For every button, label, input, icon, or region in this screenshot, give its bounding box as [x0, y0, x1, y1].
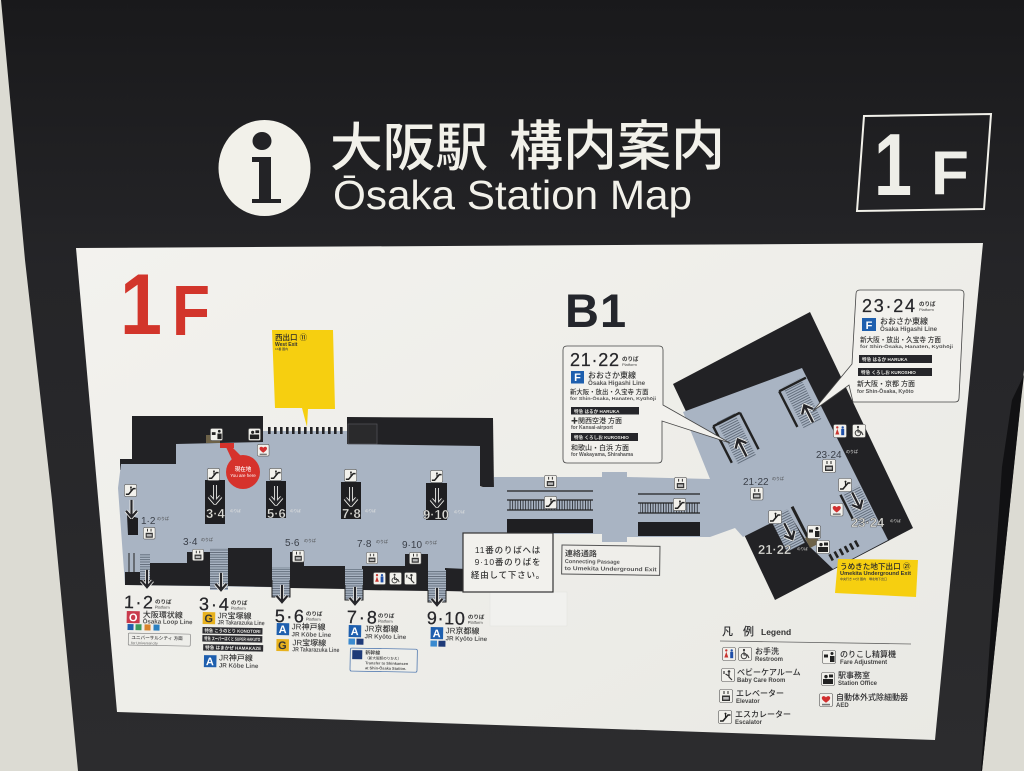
- callout: platforms 23-24: 新大阪・放出・久宝寺 方面: [860, 335, 941, 344]
- umekita exit doors: [830, 543, 858, 558]
- legend heading: 凡: [722, 625, 733, 638]
- platform info: 9-10: 9·10: [427, 608, 465, 629]
- platform info: 7-8: A: [351, 626, 359, 638]
- heading: 1F: F: [172, 272, 210, 351]
- callout: platforms 23-24: 新大阪・京都 方面: [857, 379, 915, 388]
- platform info: 9-10: A: [433, 628, 441, 640]
- callout: platforms 21-22: 和歌山・白浜 方面: [571, 443, 629, 452]
- floor platform labels: 1F: のりば: [201, 536, 213, 542]
- icons: 1F facilities: [124, 428, 443, 585]
- platform info: 5-6: [274, 606, 341, 654]
- callout: platforms 21-22: 21·22: [570, 350, 619, 370]
- platform info: 5-6: 5·6: [275, 606, 304, 626]
- legend: AED: AED: [836, 703, 849, 709]
- heading: B1: 1: [600, 284, 626, 337]
- callout: platforms 23-24: Ōsaka Higashi Line: [880, 326, 938, 333]
- platform info: 3-4: JR Kōbe Line: [219, 662, 259, 670]
- callout: platforms 21-22: F: [574, 372, 581, 384]
- callout: platforms 23-24: for Shin-Ōsaka, Kyōto: [857, 388, 914, 395]
- title: 構内案内: [509, 117, 725, 177]
- platform info: 1-2: [123, 592, 194, 646]
- platform info: 1-2: のりば: [155, 598, 172, 606]
- brown patch B1: [805, 533, 820, 548]
- callout: platforms 21-22: おおさか東線: [588, 370, 636, 380]
- floor plan: 1F south walls: [125, 548, 488, 592]
- legend: fare adjustment: Fare Adjustment: [840, 660, 887, 666]
- stairs to platforms: [129, 548, 446, 602]
- platform info: 3-4: [198, 594, 266, 670]
- platform info: 1-2: 大阪環状線: [143, 609, 183, 620]
- legend: baby care room: Baby Care Room: [737, 678, 785, 684]
- platform info: 3-4: のりば: [231, 599, 248, 607]
- callout: west exit: [272, 330, 335, 427]
- platform info: 5-6: JR宝塚線: [292, 637, 326, 648]
- callout: platforms 21-22: のりば: [622, 355, 639, 363]
- callout: platforms 23-24: 23·24: [862, 296, 915, 316]
- icons: corridor: [544, 475, 687, 511]
- platform info: 3-4: 特急 はまかぜ HAMAKAZE: [205, 644, 261, 652]
- floor platform labels: 1F: 9·10: [402, 540, 422, 551]
- floor platform labels: B1: のりば: [797, 546, 808, 551]
- floor plan: lighter wall section: [348, 424, 377, 444]
- platform info: 5-6: Platform: [306, 617, 321, 622]
- floor platform labels: 1F: 9·10: [423, 507, 449, 522]
- B1 stairs: platforms 23-24 down: [840, 485, 876, 527]
- legend: fare adjustment: [822, 649, 896, 666]
- pits 1F: [127, 480, 447, 535]
- legend: station office: Station Office: [838, 681, 878, 687]
- floor platform labels: B1: 23·24: [816, 450, 842, 461]
- platform info: 7-8: JR Kyōto Line: [365, 633, 407, 641]
- legend: baby care room: ベビーケアルーム: [737, 667, 801, 677]
- callout: umekita exit: 中央行き 10分 圏内 噂北地下出口: [840, 576, 887, 581]
- floor platform labels: B1: のりば: [890, 518, 901, 523]
- legend: elevator: エレベーター: [736, 689, 784, 698]
- floor platform labels: 1F: のりば: [290, 508, 301, 513]
- note box: connecting passage: [562, 545, 660, 575]
- callout: platforms 21-22: 特急 はるか HARUKA: [574, 408, 620, 415]
- platform info: 9-10: のりば: [468, 613, 485, 621]
- note box: connecting passage: 連絡通路: [565, 548, 597, 558]
- platform info: 7-8: 新幹線: [365, 649, 380, 657]
- corridor stairs: [507, 491, 700, 536]
- callout: umekita exit: [835, 559, 918, 597]
- platform info: 7-8: [346, 607, 418, 672]
- legend: station office: [822, 670, 878, 687]
- heading: B1: B: [565, 284, 599, 337]
- floor platform labels: B1: のりば: [772, 475, 784, 481]
- callout: platforms 21-22: ✚関西空港 方面: [571, 416, 622, 425]
- floor platform labels: B1: 21·22: [743, 477, 769, 488]
- title: Ōsaka Station Map: [333, 172, 692, 218]
- panel: station map: [76, 243, 983, 740]
- floor plan: concourse floor: [118, 368, 888, 590]
- platform info: 3-4: G: [204, 613, 213, 625]
- arrows: 1F: [126, 485, 443, 605]
- platform info: 3-4: Platform: [231, 606, 246, 611]
- note box: connecting passage: to Umekita Underground Exit: [565, 566, 657, 573]
- you are here marker: 現在地: [235, 465, 252, 473]
- callout: platforms 23-24: 特急 くろしお KUROSHIO: [861, 369, 916, 376]
- B1 stairs: platforms 23-24 up: [778, 376, 826, 431]
- floor badge 1F: F: [931, 139, 969, 208]
- legend heading: 例: [743, 625, 754, 638]
- platform info: 5-6: JR Kōbe Line: [292, 631, 332, 639]
- title: 大阪駅: [330, 120, 488, 178]
- floor platform labels: 1F: のりば: [157, 515, 169, 521]
- floor platform labels: 1F: のりば: [365, 508, 376, 513]
- floor plan: B1 walls: [673, 312, 913, 600]
- legend: station office: 駅事務室: [838, 670, 870, 680]
- callout: platforms 23-24: 特急 はるか HARUKA: [862, 356, 908, 363]
- legend: escalator: Escalator: [735, 720, 763, 726]
- callout: west exit: 西出口 ⑪: [275, 332, 308, 342]
- platform info: 1-2: for Universal city: [131, 641, 158, 646]
- callout: west exit: West Exit: [275, 342, 298, 348]
- legend: [718, 625, 911, 726]
- floor platform labels: 1F: のりば: [230, 508, 241, 513]
- legend: fare adjustment: のりこし精算機: [840, 649, 896, 659]
- platform info: 3-4: 3·4: [199, 594, 229, 615]
- floor platform labels: B1: 21·22: [758, 542, 791, 557]
- callout: platforms 21-22: Ōsaka Higashi Line: [588, 380, 646, 387]
- note box: platform 11: 経由して下さい。: [471, 570, 545, 580]
- callout: platforms 23-24: のりば: [919, 300, 936, 308]
- platform info: 7-8: Platform: [378, 619, 393, 624]
- floor platform labels: 1F: のりば: [425, 539, 437, 545]
- platform info: 5-6: のりば: [306, 610, 323, 618]
- platform info: 1-2: Platform: [155, 605, 170, 610]
- callout: platforms 21-22: for Wakayama, Shirahama: [571, 452, 633, 458]
- brown patch: [206, 435, 220, 443]
- floor platform labels: 1F: 5·6: [267, 506, 286, 521]
- floor platform labels: 1F: のりば: [454, 509, 465, 514]
- platform info: 3-4: 特急 スーパーはくと SUPER HAKUTO: [204, 635, 261, 643]
- info icon: [218, 120, 310, 216]
- platform info: 1-2: ユニバーサルシティ 方面: [131, 634, 183, 642]
- title: [330, 117, 725, 218]
- platform info: 9-10: JR京都線: [446, 625, 480, 636]
- callout: platforms 21-22: Platform: [622, 362, 638, 367]
- legend: restroom: お手洗: [755, 646, 779, 656]
- icons: B1: [750, 424, 866, 554]
- note box: platform 11: 9·10番のりばを: [475, 557, 541, 567]
- legend heading: Legend: [761, 627, 791, 637]
- note box: platform 11: [463, 533, 553, 592]
- you are here marker: [220, 443, 260, 489]
- callout: umekita exit: うめきた地下出口 ㉑: [840, 561, 911, 571]
- legend: AED: 自動体外式除細動器: [836, 692, 908, 702]
- floor plan: 1F east walls: [347, 417, 494, 490]
- callout: platforms 21-22: 特急 くろしお KUROSHIO: [574, 434, 629, 441]
- platform info: 5-6: G: [278, 640, 287, 652]
- floor badge 1F: 1: [874, 115, 912, 214]
- callout: platforms 23-24: for Shin-Ōsaka, Hanaten, Kyūhōji: [860, 343, 953, 350]
- floor platform labels: 1F: のりば: [304, 537, 316, 543]
- callout: platforms 23-24: Platform: [919, 307, 935, 312]
- legend: baby care room: [722, 667, 801, 684]
- callout: platforms 21-22: [563, 346, 730, 463]
- platform info: 3-4: A: [206, 656, 214, 668]
- platform info: 7-8: （新大阪駅のりかえ）: [365, 655, 401, 661]
- floor platform labels: B1: 23·24: [851, 515, 885, 530]
- platform info: 7-8: のりば: [378, 612, 395, 620]
- heading: B1: [565, 284, 626, 337]
- floor platform labels: 1F: 7·8: [342, 506, 361, 521]
- platform info: 5-6: JR神戸線: [292, 621, 326, 632]
- platform info: 3-4: JR宝塚線: [218, 610, 252, 621]
- platform info: 9-10: Platform: [468, 620, 483, 625]
- platform info: 7-8: Transfer to Shinkansen: [365, 660, 409, 666]
- platform info: 3-4: 特急 こうのとり KONOTORI: [204, 627, 261, 635]
- legend: escalator: [718, 710, 791, 726]
- platform info: 9-10: [426, 608, 488, 648]
- platform info: 9-10: JR Kyōto Line: [445, 635, 488, 643]
- floor platform labels: B1: [743, 448, 901, 557]
- note box: connecting passage: Connecting Passage: [565, 559, 620, 566]
- callout: platforms 23-24: おおさか東線: [880, 316, 928, 326]
- patch on panel: [490, 592, 567, 626]
- B1 stairs: platforms 21-22 down: [770, 507, 809, 552]
- legend: restroom: [722, 646, 783, 663]
- callout: west exit: 16番 圏内: [275, 346, 288, 351]
- floor platform labels: 1F: 7·8: [357, 539, 372, 550]
- floor platform labels: 1F: のりば: [376, 538, 388, 544]
- legend: AED: [820, 692, 908, 709]
- callout: umekita exit: Umekita Underground Exit: [840, 571, 911, 577]
- callout: platforms 23-24: [813, 290, 964, 411]
- floor platform labels: 1F: [141, 506, 465, 551]
- platform info: 1-2: 1·2: [124, 592, 153, 612]
- legend: escalator: エスカレーター: [735, 710, 791, 719]
- legend heading: [720, 625, 911, 644]
- platform info: 5-6: A: [279, 624, 287, 636]
- floor plan: 1F walls: [120, 416, 263, 470]
- B1 stairs: platforms 21-22 up: [712, 411, 761, 467]
- floor platform labels: 1F: 3·4: [206, 506, 226, 521]
- west exit doors: [268, 427, 343, 434]
- platform info: 1-2: O: [129, 612, 138, 624]
- heading: 1F: 1: [120, 257, 162, 353]
- board side edge: [981, 375, 1024, 771]
- floor platform labels: 1F: 1·2: [141, 516, 156, 527]
- platform info: 5-6: JR Takarazuka Line: [292, 646, 340, 654]
- note box: platform 11: 11番のりばへは: [475, 545, 541, 555]
- you are here marker: You are here: [230, 473, 256, 478]
- platform info: 3-4: JR Takarazuka Line: [218, 619, 265, 627]
- callout: platforms 21-22: 新大阪・放出・久宝寺 方面: [570, 387, 649, 396]
- callout: platforms 21-22: for Kansai-airport: [571, 425, 613, 431]
- legend: elevator: [720, 689, 784, 705]
- legend: elevator: Elevator: [736, 699, 760, 705]
- floor badge 1F: [857, 114, 991, 214]
- heading: 1F: [120, 257, 210, 353]
- callout: platforms 23-24: F: [866, 320, 873, 332]
- platform info: 7-8: at Shin-Ōsaka Station.: [365, 665, 406, 671]
- floor platform labels: 1F: 5·6: [285, 538, 300, 549]
- callout: platforms 21-22: for Shin-Ōsaka, Hanaten, Kyūhōji: [570, 395, 656, 401]
- floor platform labels: 1F: 3·4: [183, 537, 198, 548]
- platform info: 1-2: Ōsaka Loop Line: [143, 618, 193, 626]
- platform info: 7-8: JR京都線: [365, 623, 399, 634]
- floor platform labels: B1: のりば: [846, 448, 858, 454]
- platform info: 3-4: JR神戸線: [219, 652, 253, 663]
- platform info: 7-8: 7·8: [347, 607, 377, 628]
- legend: restroom: Restroom: [755, 657, 783, 663]
